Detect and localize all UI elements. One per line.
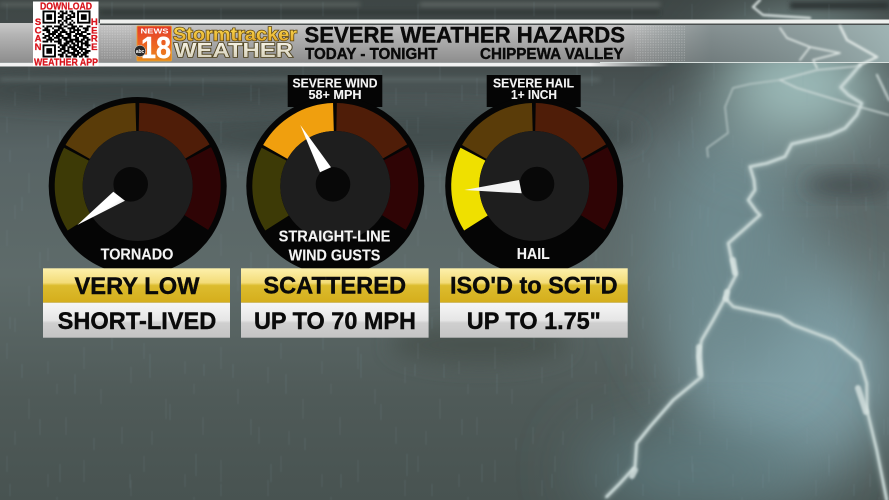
thin branch <box>707 80 780 157</box>
lightning bolt <box>607 0 889 500</box>
QR scan label: N <box>35 42 42 53</box>
logo badge <box>137 26 172 61</box>
station logo <box>134 24 297 65</box>
channel number: 18 <box>141 30 171 65</box>
hail detail box <box>440 303 628 338</box>
QR here label: R <box>91 34 98 44</box>
QR here label: E <box>91 42 97 53</box>
wind detail box: UP TO 70 MPH <box>254 308 416 335</box>
top branch <box>753 0 810 18</box>
QR heading: DOWNLOAD <box>40 2 92 13</box>
severe wind threshold text: 58+ MPH <box>308 88 362 102</box>
tornado gauge <box>43 91 233 281</box>
right branch <box>780 66 889 115</box>
severe wind threshold text <box>292 76 378 102</box>
lightning fork <box>725 298 887 500</box>
lightning glow <box>607 65 887 500</box>
panel: hail <box>439 75 629 338</box>
severe hail threshold text: 1+ INCH <box>511 88 557 102</box>
tornado detail box <box>43 303 230 338</box>
subtitle: location: CHIPPEWA VALLEY <box>480 46 624 63</box>
hail label: HAIL <box>517 246 550 263</box>
thick glowing segments <box>632 260 866 476</box>
main lightning trunk <box>607 65 862 497</box>
top white rule <box>100 20 889 24</box>
dark rule <box>100 24 889 25</box>
wind label <box>279 229 391 265</box>
wind likelihood box <box>241 268 429 303</box>
WEATHER wordmark: WEATHER <box>174 40 294 62</box>
header bar <box>0 20 889 66</box>
wind label: WIND GUSTS <box>289 248 381 265</box>
title: SEVERE WEATHER HAZARDS <box>304 23 625 48</box>
wind likelihood box: SCATTERED <box>263 272 406 300</box>
NEWS label: NEWS <box>140 26 168 36</box>
severe hail tab <box>487 75 581 107</box>
QR code panel <box>33 2 98 68</box>
tornado likelihood box: VERY LOW <box>74 273 200 300</box>
hail likelihood box: ISO'D to SCT'D <box>450 272 618 300</box>
network bug: abc <box>136 49 145 55</box>
wind label: STRAIGHT-LINE <box>279 229 391 246</box>
Stormtracker wordmark: Stormtracker <box>173 24 297 44</box>
panel: wind <box>240 75 430 338</box>
tornado label: TORNADO <box>101 246 173 263</box>
subtitle: timeframe: TODAY - TONIGHT <box>305 46 438 63</box>
QR scan label: S <box>35 17 41 28</box>
wind gauge <box>240 91 430 281</box>
bottom white rule <box>0 62 670 66</box>
QR code <box>42 10 90 58</box>
severe wind tab <box>288 75 382 107</box>
QR here label: E <box>91 26 97 36</box>
header dotted texture <box>100 26 132 59</box>
panel: tornado <box>43 91 233 338</box>
hail detail box: UP TO 1.75" <box>467 308 601 335</box>
severe hail threshold text <box>493 76 574 102</box>
tornado likelihood box <box>43 268 230 303</box>
QR footer: WEATHER APP <box>34 57 98 68</box>
tornado detail box: SHORT-LIVED <box>58 308 216 335</box>
far right branch <box>877 75 889 100</box>
QR here label: H <box>91 17 98 28</box>
network bug <box>134 45 146 57</box>
QR scan label: A <box>35 34 42 44</box>
bottom thin rule <box>600 62 889 63</box>
severe wind threshold text: SEVERE WIND <box>292 76 378 90</box>
severe hail threshold text: SEVERE HAIL <box>493 76 574 90</box>
hail gauge <box>439 91 629 281</box>
wind detail box <box>241 303 429 338</box>
QR scan label: C <box>35 26 42 36</box>
lightning over header <box>780 26 877 68</box>
